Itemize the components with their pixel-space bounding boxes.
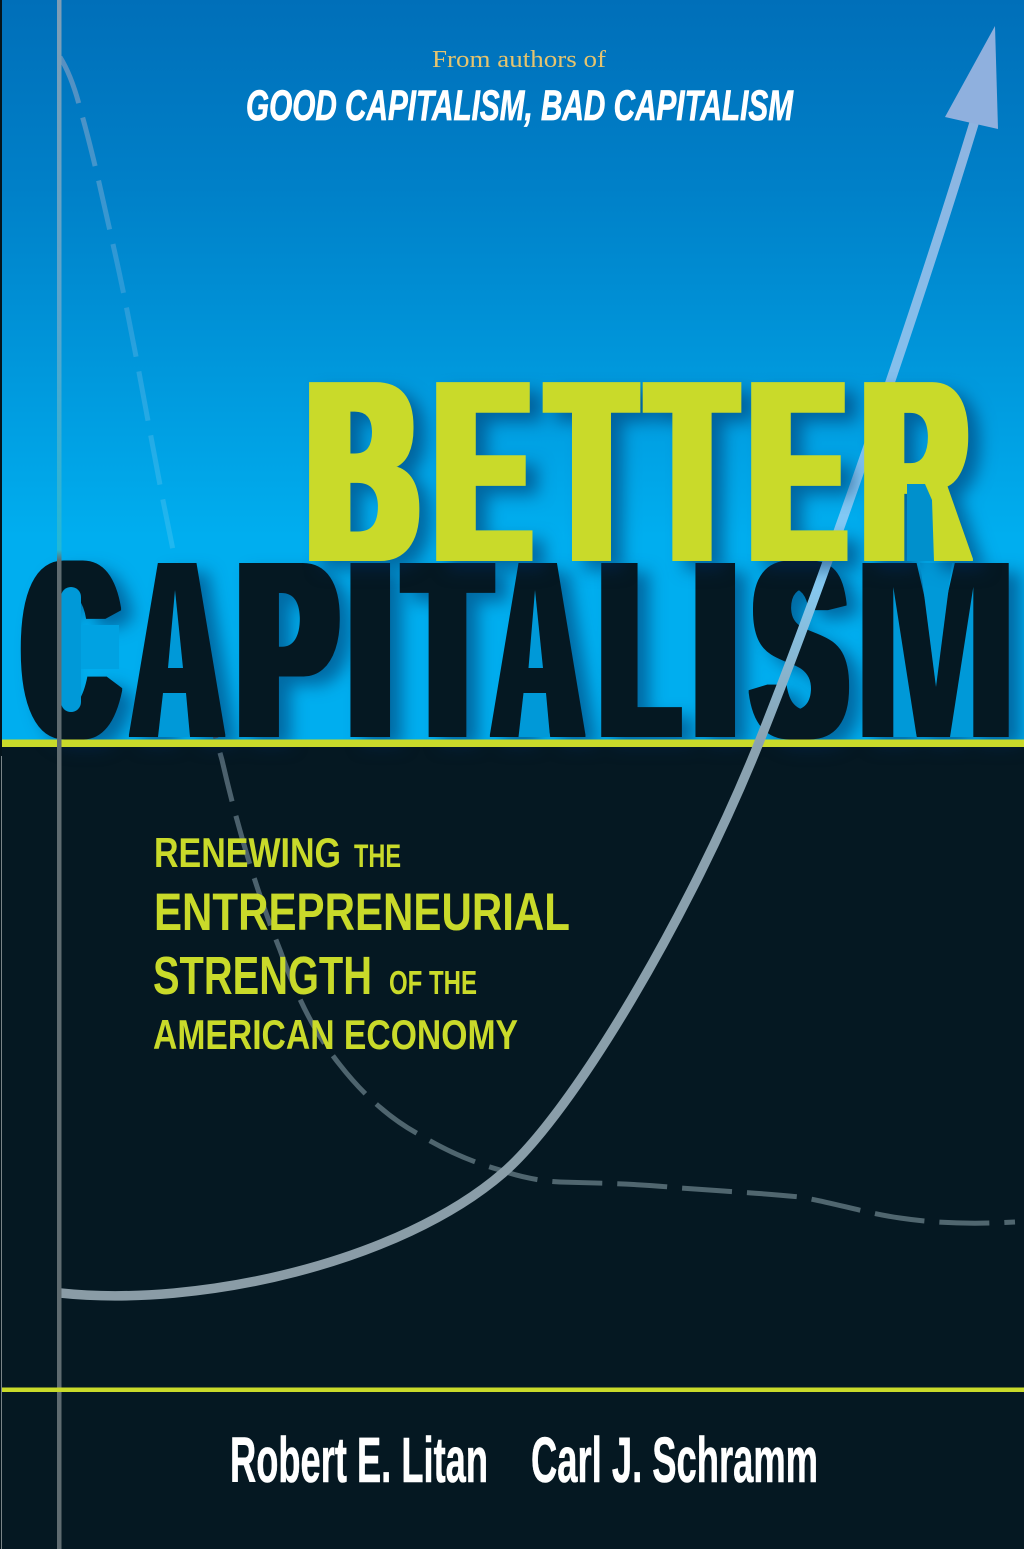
left edge highlight: [1, 756, 2, 1549]
title word: CAPITALISM: C: [25, 510, 116, 789]
left edge: [0, 0, 2, 1549]
title word: BETTER: T: [651, 328, 733, 615]
title word: CAPITALISM: P: [239, 510, 335, 789]
icon: arrowhead: [945, 26, 998, 129]
title word: CAPITALISM: T: [408, 510, 487, 789]
panel: dark lower background: [0, 745, 1024, 1549]
subtitle line 4: AMERICAN ECONOMY: [153, 1011, 518, 1058]
letter counters in CAPITALISM: [61, 563, 973, 737]
title word: BETTER: B: [309, 328, 416, 615]
title word: CAPITALISM: A: [496, 510, 579, 789]
title word: BETTER: E: [437, 328, 528, 615]
panel: blue sky background: [0, 0, 1024, 745]
subtitle line 1: THE: [354, 838, 401, 874]
author: Carl J. Schramm: Carl J. Schramm: [531, 1424, 818, 1496]
title word: BETTER: [309, 328, 966, 615]
letter counter in BETTER R: [907, 484, 934, 561]
rising growth curve with arrow: [60, 26, 998, 1296]
title word: CAPITALISM: S: [754, 510, 845, 789]
title word: CAPITALISM: A: [136, 510, 219, 789]
subtitle line 1: RENEWING: [154, 829, 341, 876]
subtitle line 3: STRENGTH: [153, 946, 372, 1006]
lime rule under title: [2, 740, 1024, 747]
lime rule above authors: [2, 1388, 1024, 1392]
subtitle line 3: OF THE: [389, 964, 477, 1001]
title word: BETTER: E: [752, 328, 843, 615]
title word: CAPITALISM: I: [350, 510, 390, 789]
title word: CAPITALISM: [25, 510, 1011, 789]
previous book title: GOOD CAPITALISM, BAD CAPITALISM: [246, 82, 794, 130]
title word: CAPITALISM: I: [695, 510, 735, 789]
dashed declining curve: [60, 57, 1015, 1223]
subtitle block: [153, 829, 570, 1058]
vertical axis line: [57, 0, 62, 1549]
author: Robert E. Litan: Robert E. Litan: [230, 1424, 488, 1496]
title word: BETTER: T: [551, 328, 632, 615]
tagline: from authors of: From authors of: [432, 47, 606, 73]
subtitle line 2: ENTREPRENEURIAL: [154, 883, 570, 942]
title word: CAPITALISM: L: [603, 510, 676, 789]
